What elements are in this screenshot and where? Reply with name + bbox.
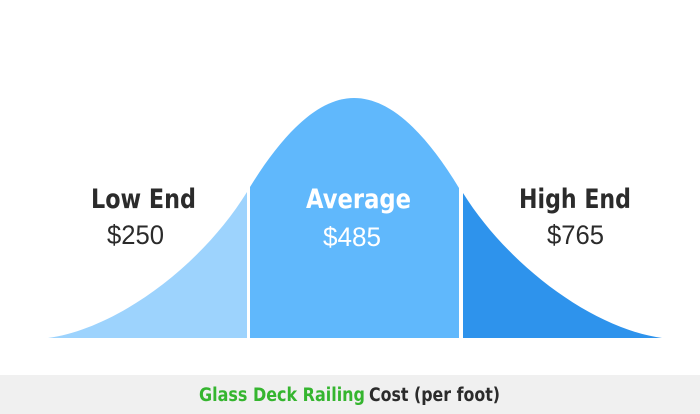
high end label: High End (519, 184, 631, 215)
low end label: Low End (91, 184, 196, 215)
average curve area (250, 98, 459, 338)
panel: average segment (250, 98, 459, 338)
low end price: $250 (107, 220, 164, 250)
footer caption bar (0, 375, 700, 414)
caption: dark remainder: Cost (per foot) (369, 385, 500, 406)
caption: green title: Glass Deck Railing (199, 385, 365, 406)
average label: Average (306, 184, 411, 215)
low end curve area (48, 192, 247, 338)
average price: $485 (323, 222, 381, 252)
high end curve area (463, 193, 662, 338)
high end price: $765 (547, 220, 604, 250)
panel: low end segment (48, 184, 247, 338)
panel: high end segment (463, 184, 662, 338)
